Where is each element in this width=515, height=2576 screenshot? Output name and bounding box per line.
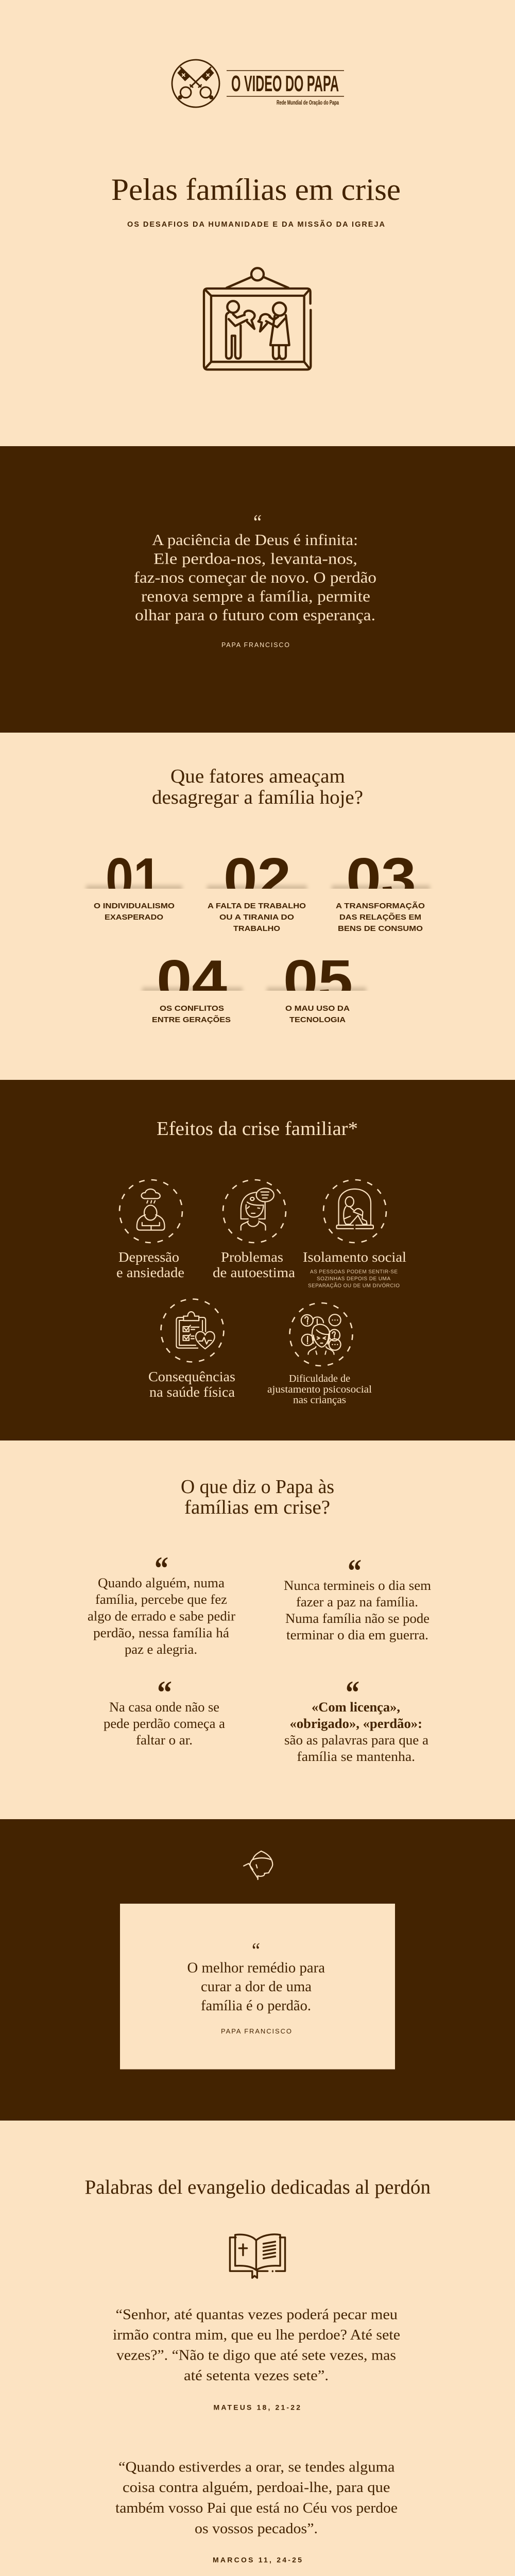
- quote: the house without forgiveness: Na casa onde não se: [109, 1700, 219, 1715]
- quote: asking forgiveness: Quando alguém, numa: [98, 1575, 225, 1590]
- quote: the three words: [284, 1674, 428, 1764]
- quote text: olhar para o futuro com esperança.: [135, 606, 375, 624]
- quote: the three words: «obrigado», «perdão»:: [289, 1716, 422, 1731]
- icon: open bible: [230, 2234, 285, 2278]
- quote: asking forgiveness: paz e alegria.: [125, 1642, 197, 1657]
- factor 01: EXASPERADO: [105, 913, 163, 922]
- effect: self-esteem: de autoestima: [213, 1265, 295, 1280]
- factor 02: TRABALHO: [233, 924, 280, 933]
- quote: the house without forgiveness: “: [157, 1674, 172, 1710]
- quote: the three words: família se mantenha.: [297, 1749, 415, 1764]
- effect: children's adjustment: ajustamento psicosocial: [267, 1384, 372, 1395]
- effect: children's adjustment: [267, 1303, 372, 1405]
- quote: end the day in peace: Numa família não se pode: [285, 1611, 430, 1626]
- quote text: Ele perdoa-nos, levanta-nos,: [153, 549, 357, 568]
- note: isolation: SOZINHAS DEPOIS DE UMA: [317, 1276, 390, 1282]
- quote card: O melhor remédio para: [187, 1960, 325, 1976]
- scripture: Matthew: [113, 2306, 400, 2411]
- quote: asking forgiveness: “: [154, 1550, 168, 1586]
- scripture: Mark: [115, 2459, 398, 2564]
- factor 02: [205, 858, 308, 931]
- quote text: A paciência de Deus é infinita:: [152, 531, 358, 549]
- quote card: [120, 1904, 395, 2069]
- quote text: [134, 531, 376, 624]
- scripture: Mark: também vosso Pai que está no Céu vos perdoe: [115, 2500, 398, 2516]
- effect: physical health: [148, 1299, 235, 1400]
- factor 03: DAS RELAÇÕES EM: [339, 912, 421, 922]
- factor 02: OU A TIRANIA DO: [219, 913, 294, 922]
- title: Pelas famílias em crise: [111, 173, 401, 207]
- quote: end the day in peace: “: [348, 1552, 362, 1589]
- logo: O Video do Papa: [172, 60, 344, 107]
- quote: end the day in peace: fazer a paz na família.: [296, 1595, 418, 1609]
- scripture: Matthew: MATEUS 18, 21-22: [213, 2403, 300, 2411]
- factor 01: 01: [106, 846, 161, 910]
- factor 04: OS CONFLITOS: [160, 1004, 224, 1013]
- effect: depression: Depressão: [118, 1249, 179, 1265]
- quote card: curar a dor de uma: [201, 1978, 312, 1995]
- logo: O Video do Papa: Rede Mundial de Oração do Papa: [277, 100, 339, 106]
- quote: the three words: “: [346, 1674, 359, 1710]
- note: isolation: [308, 1269, 400, 1289]
- factor 04: 04: [157, 948, 227, 1012]
- quote text: faz-nos começar de novo. O perdão: [134, 568, 376, 586]
- quote card: “: [252, 1939, 260, 1963]
- panel: quote from Pope Francis: [0, 446, 515, 733]
- panel: effects of the family crisis: [0, 1080, 515, 1440]
- scripture: Matthew: irmão contra mim, que eu lhe perdoe? Até sete: [113, 2327, 400, 2343]
- effect: children's adjustment: nas crianças: [293, 1394, 346, 1405]
- scripture: Mark: “Quando estiverdes a orar, se tendes alguma: [118, 2459, 395, 2475]
- quote card: família é o perdão.: [201, 1997, 311, 2014]
- icon: Pope Francis portrait: [244, 1851, 272, 1879]
- quote: asking forgiveness: [88, 1550, 235, 1657]
- factor 04: ENTRE GERAÇÕES: [152, 1015, 231, 1024]
- heading: factors: Que fatores ameaçam: [170, 766, 345, 787]
- factor 01: O INDIVIDUALISMO: [94, 902, 175, 910]
- scripture: Mark: MARCOS 11, 24-25: [213, 2555, 302, 2564]
- heading: effects: Efeitos da crise familiar*: [157, 1118, 358, 1140]
- icon: family portrait with broken heart: [204, 268, 311, 369]
- effect: self-esteem: [213, 1180, 295, 1280]
- quote: asking forgiveness: perdão, nessa família há: [93, 1625, 229, 1640]
- factor 01: [84, 858, 184, 920]
- heading: factors: desagregar a família hoje?: [152, 787, 363, 808]
- heading: gospel words: Palabras del evangelio dedicadas al perdón: [84, 2176, 431, 2198]
- effect: social isolation: [303, 1180, 406, 1289]
- factor 03: A TRANSFORMAÇÃO: [336, 901, 425, 910]
- scripture: Matthew: vezes?”. “Não te digo que até sete vezes, mas: [116, 2347, 396, 2364]
- quote: asking forgiveness: algo de errado e sabe pedir: [88, 1608, 235, 1624]
- effect: physical health: na saúde física: [149, 1384, 235, 1400]
- quote card: PAPA FRANCISCO: [221, 2027, 291, 2035]
- factor 03: [330, 857, 432, 931]
- effect: self-esteem: Problemas: [221, 1249, 283, 1265]
- quote: the three words: são as palavras para que a: [284, 1733, 428, 1748]
- logo: O Video do Papa: O VIDEO DO PAPA: [231, 71, 339, 96]
- heading: what the Pope says: [181, 1476, 334, 1518]
- scripture: Mark: coisa contra alguém, perdoai-lhe, para que: [123, 2479, 390, 2496]
- effect: social isolation: Isolamento social: [303, 1249, 406, 1265]
- quote: the house without forgiveness: faltar o ar.: [136, 1733, 193, 1748]
- heading: what the Pope says: famílias em crise?: [184, 1497, 330, 1518]
- quote: end the day in peace: [284, 1552, 431, 1642]
- attribution: PAPA FRANCISCO: [221, 641, 289, 649]
- note: isolation: AS PESSOAS PODEM SENTIR-SE: [310, 1269, 398, 1275]
- note: isolation: SEPARAÇÃO OU DE UM DIVÓRCIO: [308, 1282, 400, 1289]
- factor 03: BENS DE CONSUMO: [338, 924, 423, 933]
- scripture: Mark: os vossos pecados”.: [195, 2520, 318, 2537]
- factor 05: 05: [283, 948, 353, 1012]
- factor 04: [141, 960, 244, 1024]
- effect: children's adjustment: Dificuldade de: [289, 1373, 350, 1384]
- panel: best remedy quote: [0, 1819, 515, 2121]
- factor 03: 03: [346, 846, 416, 910]
- factor 02: 02: [224, 846, 291, 910]
- quote mark: “: [253, 511, 262, 535]
- factor 05: TECNOLOGIA: [289, 1015, 346, 1024]
- heading: factors: [152, 766, 363, 808]
- subtitle: OS DESAFIOS DA HUMANIDADE E DA MISSÃO DA IGREJA: [127, 219, 385, 229]
- quote: the three words: «Com licença»,: [312, 1700, 400, 1715]
- factor 05: O MAU USO DA: [285, 1004, 350, 1013]
- quote: end the day in peace: terminar o dia em guerra.: [286, 1628, 428, 1642]
- heading: what the Pope says: O que diz o Papa às: [181, 1476, 334, 1498]
- quote: the house without forgiveness: [104, 1674, 225, 1748]
- effect: depression: e ansiedade: [116, 1265, 184, 1280]
- factor 05: [265, 960, 368, 1022]
- quote: asking forgiveness: família, percebe que fez: [95, 1592, 227, 1607]
- scripture: Matthew: “Senhor, até quantas vezes poderá pecar meu: [115, 2306, 398, 2323]
- scripture: Matthew: até setenta vezes sete”.: [184, 2367, 329, 2384]
- quote: end the day in peace: Nunca termineis o dia sem: [284, 1578, 431, 1593]
- effect: depression: [116, 1180, 184, 1280]
- quote: the house without forgiveness: pede perdão começa a: [104, 1716, 225, 1731]
- quote text: renova sempre a família, permite: [141, 587, 370, 605]
- factor 02: A FALTA DE TRABALHO: [208, 902, 306, 910]
- effect: physical health: Consequências: [148, 1369, 235, 1384]
